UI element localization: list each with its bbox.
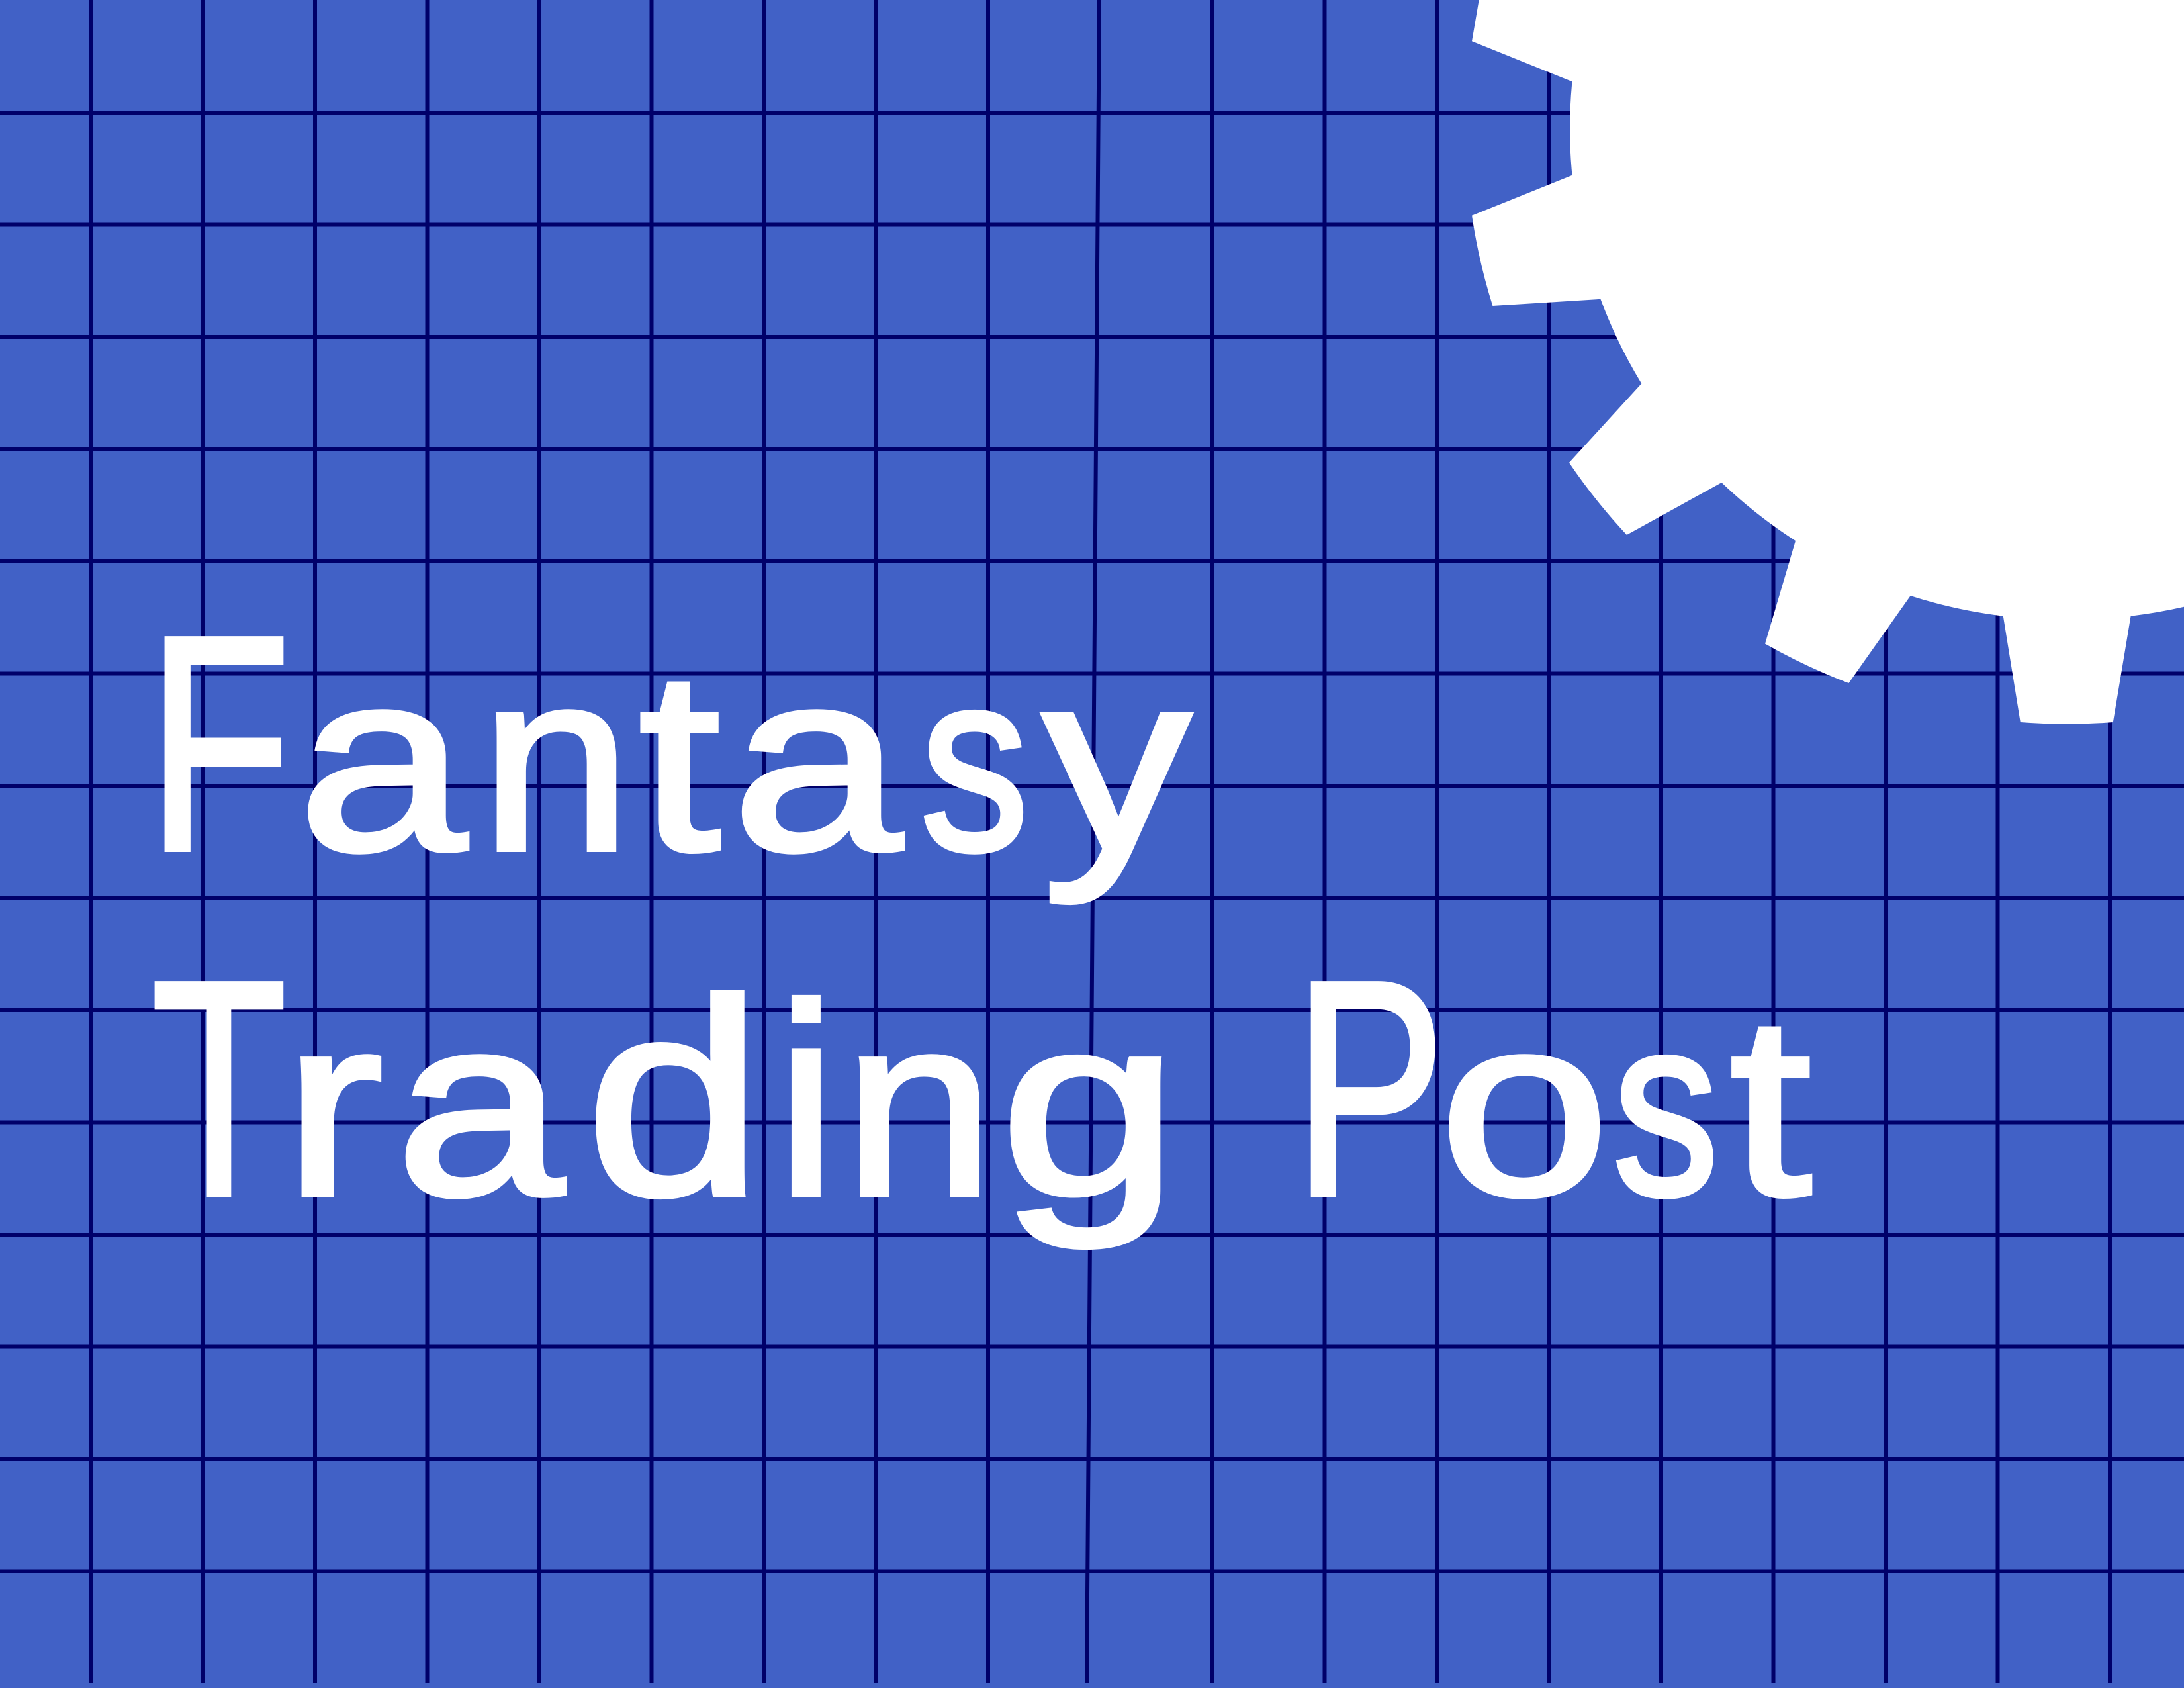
title line: Fantasy: a — [298, 618, 469, 904]
title line: Fantasy: n — [480, 618, 631, 904]
title line: Trading Post: d — [586, 943, 763, 1254]
title line: Fantasy: F — [147, 573, 291, 914]
title line: Fantasy: y — [1043, 618, 1191, 905]
title line: Trading Post: n — [844, 963, 994, 1248]
title line: Trading Post: T — [152, 917, 287, 1259]
icon: white gear in top-right corner — [1472, 0, 2184, 724]
title line: Trading Post: i — [776, 949, 837, 1252]
title line: Trading Post: o — [1439, 963, 1610, 1248]
title line: Trading Post: r — [284, 963, 383, 1248]
title line: Trading Post: t — [1730, 963, 1813, 1248]
title line: Trading Post: P — [1295, 917, 1445, 1259]
title line: Fantasy: t — [639, 618, 721, 904]
title line: Fantasy: a — [732, 618, 903, 904]
title line: Trading Post: a — [396, 963, 566, 1248]
title line: Trading Post: s — [1613, 963, 1719, 1248]
title — [147, 573, 1813, 1259]
title line: Trading Post: g — [1000, 963, 1179, 1250]
title line: Fantasy: s — [921, 618, 1029, 904]
